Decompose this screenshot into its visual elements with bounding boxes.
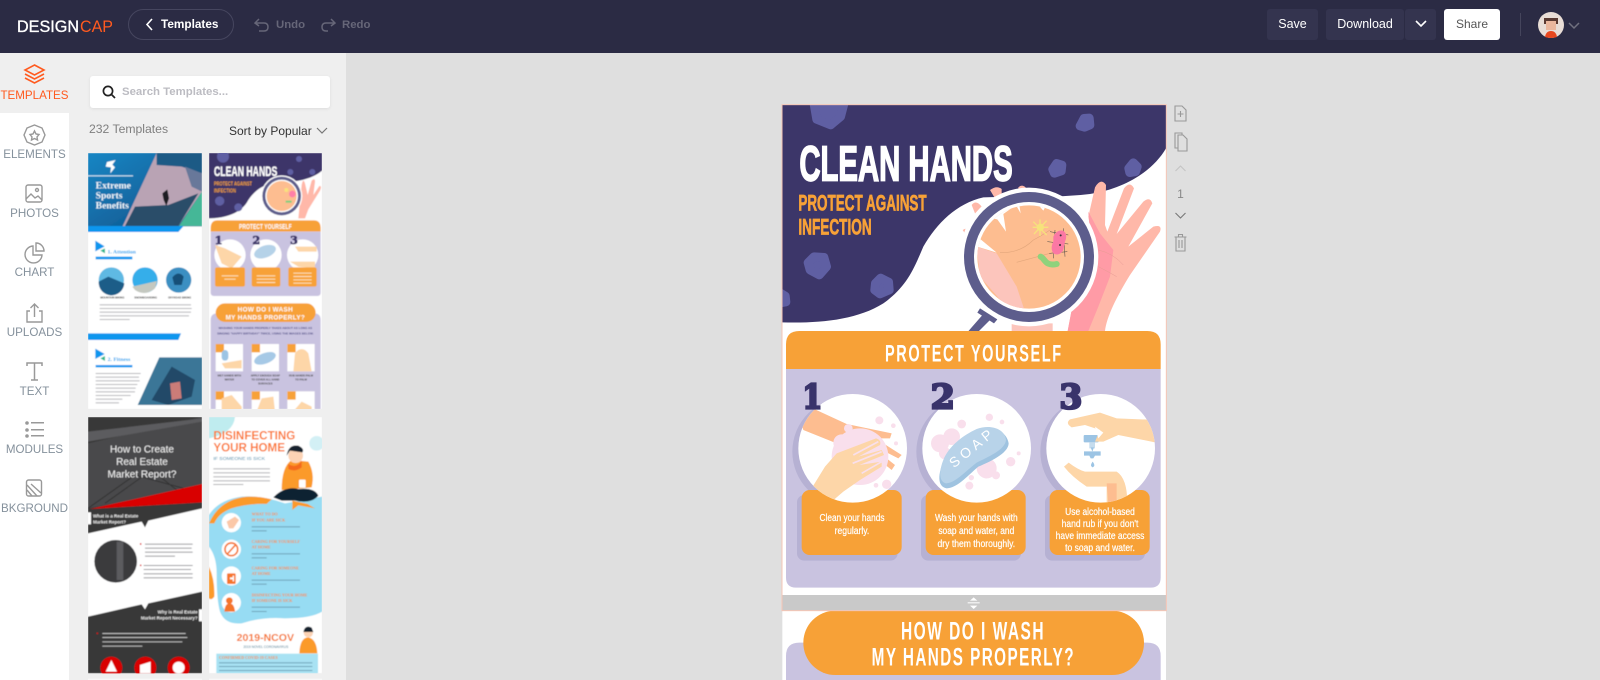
- thumbnail: clean hands: PROTECT AGAINST: [214, 181, 252, 187]
- logo: [17, 17, 113, 36]
- tool: add page: [1175, 106, 1186, 121]
- thumbnail: disinfecting your home: 2019 NOVEL CORONAVIRUS: [243, 645, 289, 649]
- navigation rail: [0, 53, 69, 680]
- tab: photos: [10, 184, 59, 220]
- undo: Undo: [276, 19, 305, 31]
- step 1 illustration: washing hands: [798, 394, 907, 503]
- tab: uploads: [7, 303, 62, 339]
- wrist under magnifier: [1012, 323, 1053, 332]
- redo: [321, 18, 370, 32]
- user avatar: [1538, 12, 1580, 38]
- germ: pink: [1047, 228, 1068, 258]
- tab: chart: [15, 242, 54, 279]
- tab: background: [1, 479, 68, 515]
- search box: [90, 76, 330, 108]
- panel: protect yourself: [786, 331, 1161, 588]
- save button: [1267, 9, 1318, 40]
- step 2 illustration: soap: SOAP: [946, 424, 999, 471]
- tool: page up: [1176, 166, 1186, 171]
- thumbnail: clean hands: 3: [290, 233, 298, 247]
- thumbnail: extreme sports benefits: [88, 153, 202, 409]
- subtitle: PROTECT AGAINST: [798, 191, 927, 216]
- panel heading: [786, 331, 1161, 369]
- tool: page down: [1176, 213, 1186, 218]
- thumbnail: extreme sports benefits: SNOWBOARDING: [134, 296, 157, 300]
- step 3 card: Use alcohol-based: [1065, 507, 1135, 518]
- thumbnail: real estate market report: Market Report?: [93, 519, 126, 524]
- download menu button: [1405, 9, 1436, 40]
- page resize handle: [782, 595, 1166, 611]
- step 2 illustration: soap: [922, 394, 1031, 503]
- download button: Download: [1337, 17, 1393, 31]
- thumbnail: clean hands: HOW DO I WASH: [238, 306, 293, 313]
- step 2 card: dry them thoroughly.: [938, 539, 1015, 550]
- subtitle: INFECTION: [798, 215, 872, 240]
- active tab: templates: TEMPLATES: [0, 89, 69, 102]
- thumbnail: real estate market report: [88, 417, 202, 679]
- step 1 card: Clean your hands: [820, 513, 884, 524]
- title: CLEAN HANDS: [799, 137, 1013, 192]
- tab: modules: [6, 421, 63, 456]
- search placeholder: Search Templates...: [122, 86, 228, 98]
- thumbnail: clean hands: MY HANDS PROPERLY?: [226, 314, 305, 321]
- thumbnail: extreme sports benefits: MOUNTAIN BIKING: [100, 296, 124, 300]
- page background: [782, 105, 1166, 680]
- selected page outline: [782, 105, 1166, 611]
- next row thumbnail edges: [88, 679, 322, 680]
- step 3 card: to soap and water.: [1065, 543, 1135, 554]
- thumbnail: disinfecting your home: [209, 417, 324, 673]
- left templates panel: [0, 53, 346, 680]
- templates back button: [128, 9, 234, 40]
- tab: photos: PHOTOS: [10, 207, 59, 220]
- template count: 232 Templates: [89, 122, 168, 136]
- thumbnail: clean hands: 2: [252, 233, 260, 247]
- hand behind magnifier: [1068, 182, 1161, 331]
- step 3 card: hand rub if you don't: [1062, 519, 1139, 530]
- thumbnail: disinfecting your home: YOUR HOME: [213, 441, 285, 455]
- step 1 card: [802, 490, 902, 555]
- thumbnail: clean hands: CLEAN HANDS: [214, 163, 277, 179]
- thumbnail: real estate market report: Market Report?: [108, 469, 177, 480]
- dark purple header wave: [782, 105, 1166, 322]
- thumbnail: clean hands: APPLY ENOUGH SOAP: [251, 374, 280, 378]
- search icon: [102, 86, 116, 99]
- canvas page tools: [1174, 106, 1188, 252]
- logo: DESIGN: [17, 17, 79, 36]
- thumbnail: clean hands: WET HANDS WITH: [218, 374, 241, 378]
- step number 3: 3: [1059, 377, 1082, 416]
- thumbnail: extreme sports benefits: OFFROAD BIKING: [168, 296, 191, 300]
- thumbnail: clean hands: 1: [215, 233, 223, 247]
- thumbnail: disinfecting your home: IF SOMEONE IS SICK: [213, 456, 266, 461]
- save button: Save: [1278, 17, 1307, 31]
- thumbnail: clean hands: WATER: [225, 378, 234, 382]
- thumbnail: disinfecting your home: IF SOMEONE IS SICK: [252, 598, 293, 603]
- card shadows: [792, 397, 1149, 561]
- thumbnail: clean hands: SINGING "HAPPY BIRTHDAY" TWICE, USING THE IMAGES BELOW.: [217, 331, 314, 335]
- thumbnail: disinfecting your home: AT HOME: [252, 571, 271, 576]
- tab: chart: CHART: [15, 266, 54, 279]
- thumbnail: clean hands: [209, 151, 322, 411]
- share button: Share: [1456, 17, 1488, 31]
- tab: text: [20, 362, 50, 398]
- thumbnail: disinfecting your home: WHAT TO DO: [252, 512, 278, 517]
- magnifier handle: [968, 308, 998, 331]
- thumbnail: disinfecting your home: DISINFECTING YOUR HOME: [252, 592, 308, 597]
- undo: [254, 18, 305, 32]
- thumbnail: clean hands: RUB HANDS PALM: [289, 374, 314, 378]
- logo: CAP: [80, 17, 113, 36]
- thumbnail: disinfecting your home: CARING FOR SOMEONE: [252, 565, 299, 570]
- rocks decoration: [778, 100, 1137, 303]
- germ: yellow: [1033, 219, 1048, 236]
- page number: 1: [1177, 187, 1184, 201]
- thumbnail: disinfecting your home: 2019-NCOV: [237, 633, 294, 644]
- thumbnail: clean hands: TO COVER ALL HAND: [251, 378, 279, 382]
- lens view: infected skin: [977, 203, 1083, 312]
- download button: [1326, 9, 1404, 40]
- panel heading: PROTECT YOURSELF: [885, 341, 1063, 368]
- tab: elements: [3, 124, 66, 161]
- redo: Redo: [342, 19, 370, 31]
- thumbnail: disinfecting your home: DISINFECTING: [213, 428, 295, 442]
- thumbnail: disinfecting your home: CONFIRMED COVID-19 CASES: [219, 655, 278, 660]
- template thumbnails: [88, 153, 322, 680]
- step number 1: 1: [802, 377, 822, 416]
- thumbnail: clean hands: WASHING YOUR HANDS PROPERLY TAKES ABOUT AS LONG AS: [218, 326, 312, 330]
- step 3 card: [1050, 490, 1150, 555]
- subtitle: [799, 194, 927, 235]
- thumbnail: real estate market report: Why is Real Estate: [158, 610, 198, 615]
- fingertips behind magnifier: [963, 186, 1027, 234]
- step 3 card: have immediate access: [1056, 531, 1144, 542]
- panel body: [786, 369, 1161, 588]
- tool: copy page: [1175, 133, 1187, 151]
- thumbnail: real estate market report: Market Report Necessary?: [141, 616, 198, 621]
- step number 2: 2: [931, 377, 955, 416]
- infographic canvas: [782, 104, 1167, 680]
- thumbnail: clean hands: PROTECT YOURSELF: [239, 224, 292, 231]
- thumbnail: extreme sports benefits: Sports: [96, 191, 123, 202]
- share button: [1444, 9, 1500, 40]
- thumbnail: real estate market report: What is a Real Estate: [93, 513, 139, 518]
- pill heading: HOW DO I WASH: [901, 618, 1045, 645]
- step 2 card: [926, 490, 1026, 555]
- tab: uploads: UPLOADS: [7, 326, 62, 339]
- active tab: templates: [0, 53, 69, 113]
- panel: how do i wash my hands properly: [786, 611, 1161, 680]
- tab: modules: MODULES: [6, 443, 63, 456]
- thumbnail: extreme sports benefits: Extreme: [96, 180, 132, 191]
- step 3 illustration: alcohol hand rub: [1046, 394, 1157, 503]
- thumbnail: disinfecting your home: AT HOME: [252, 544, 271, 549]
- step 2 card: Wash your hands with: [935, 513, 1018, 524]
- thumbnail: real estate market report: How to Create: [110, 444, 174, 455]
- tab: background: BKGROUND: [1, 502, 68, 515]
- step 1 card: regularly.: [835, 526, 869, 537]
- thumbnail: clean hands: SURFACES: [258, 382, 273, 386]
- sort control: Sort by Popular: [229, 124, 312, 138]
- tool: delete page: [1174, 234, 1186, 251]
- thumbnail: extreme sports benefits: Benefits: [96, 201, 129, 212]
- thumbnail: extreme sports benefits: 1. Attention: [108, 250, 137, 256]
- pill heading: MY HANDS PROPERLY?: [872, 644, 1075, 671]
- templates back button: Templates: [161, 17, 218, 31]
- thumbnail: extreme sports benefits: 2. Fitness: [108, 357, 131, 363]
- thumbnail: disinfecting your home: CARING FOR YOURSELF: [252, 539, 301, 544]
- thumbnail: disinfecting your home: IF YOU ARE SICK: [252, 517, 286, 522]
- thumbnail: clean hands: INFECTION: [214, 188, 236, 194]
- pill heading: [803, 611, 1144, 675]
- tab: elements: ELEMENTS: [3, 148, 66, 161]
- top header bar: [0, 0, 1600, 53]
- germ: green: [1041, 257, 1057, 265]
- tab: text: TEXT: [20, 385, 49, 398]
- thumbnail: real estate market report: Real Estate: [116, 457, 168, 468]
- step 2 card: soap and water, and: [938, 526, 1014, 537]
- thumbnail: clean hands: TO PALM: [295, 378, 308, 382]
- magnifying glass: [960, 188, 1098, 326]
